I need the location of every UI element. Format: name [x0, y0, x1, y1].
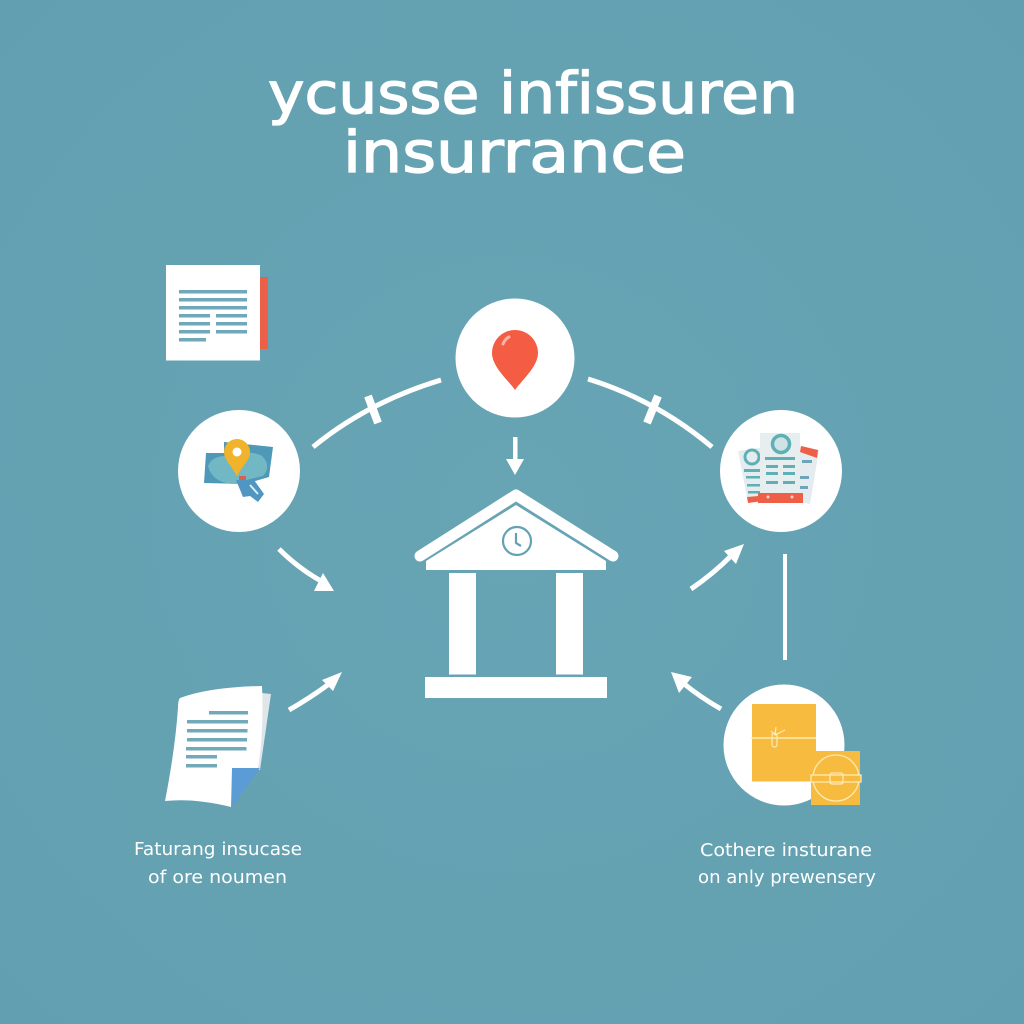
title	[268, 61, 798, 186]
icon: curled document	[165, 686, 271, 807]
icon: yellow packages circle	[724, 684, 861, 806]
arrow: map to building	[279, 549, 334, 591]
caption: right: on anly prewensery	[698, 867, 876, 888]
caption: right	[698, 840, 876, 888]
icon: bank building with clock	[420, 495, 613, 698]
arrow: pin to building	[506, 437, 524, 475]
icon: forms circle	[720, 410, 842, 532]
title: insurrance	[343, 120, 686, 186]
connector: vertical line	[783, 554, 787, 660]
connector: right arc with tick	[588, 379, 712, 447]
title: ycusse infissuren	[268, 61, 798, 127]
connector: left arc with tick	[313, 380, 441, 447]
icon: document with red tab	[166, 265, 268, 360]
caption: left	[134, 839, 302, 888]
icon: map and pin circle	[178, 410, 300, 532]
caption: left: of ore noumen	[148, 867, 287, 888]
caption: left: Faturang insucase	[134, 839, 302, 860]
arrow: building to forms	[691, 544, 744, 589]
arrow: document to building	[289, 672, 342, 710]
icon: red location pin circle	[456, 298, 574, 418]
arrow: briefcase to building	[671, 672, 721, 709]
caption: right: Cothere insturane	[700, 840, 872, 861]
